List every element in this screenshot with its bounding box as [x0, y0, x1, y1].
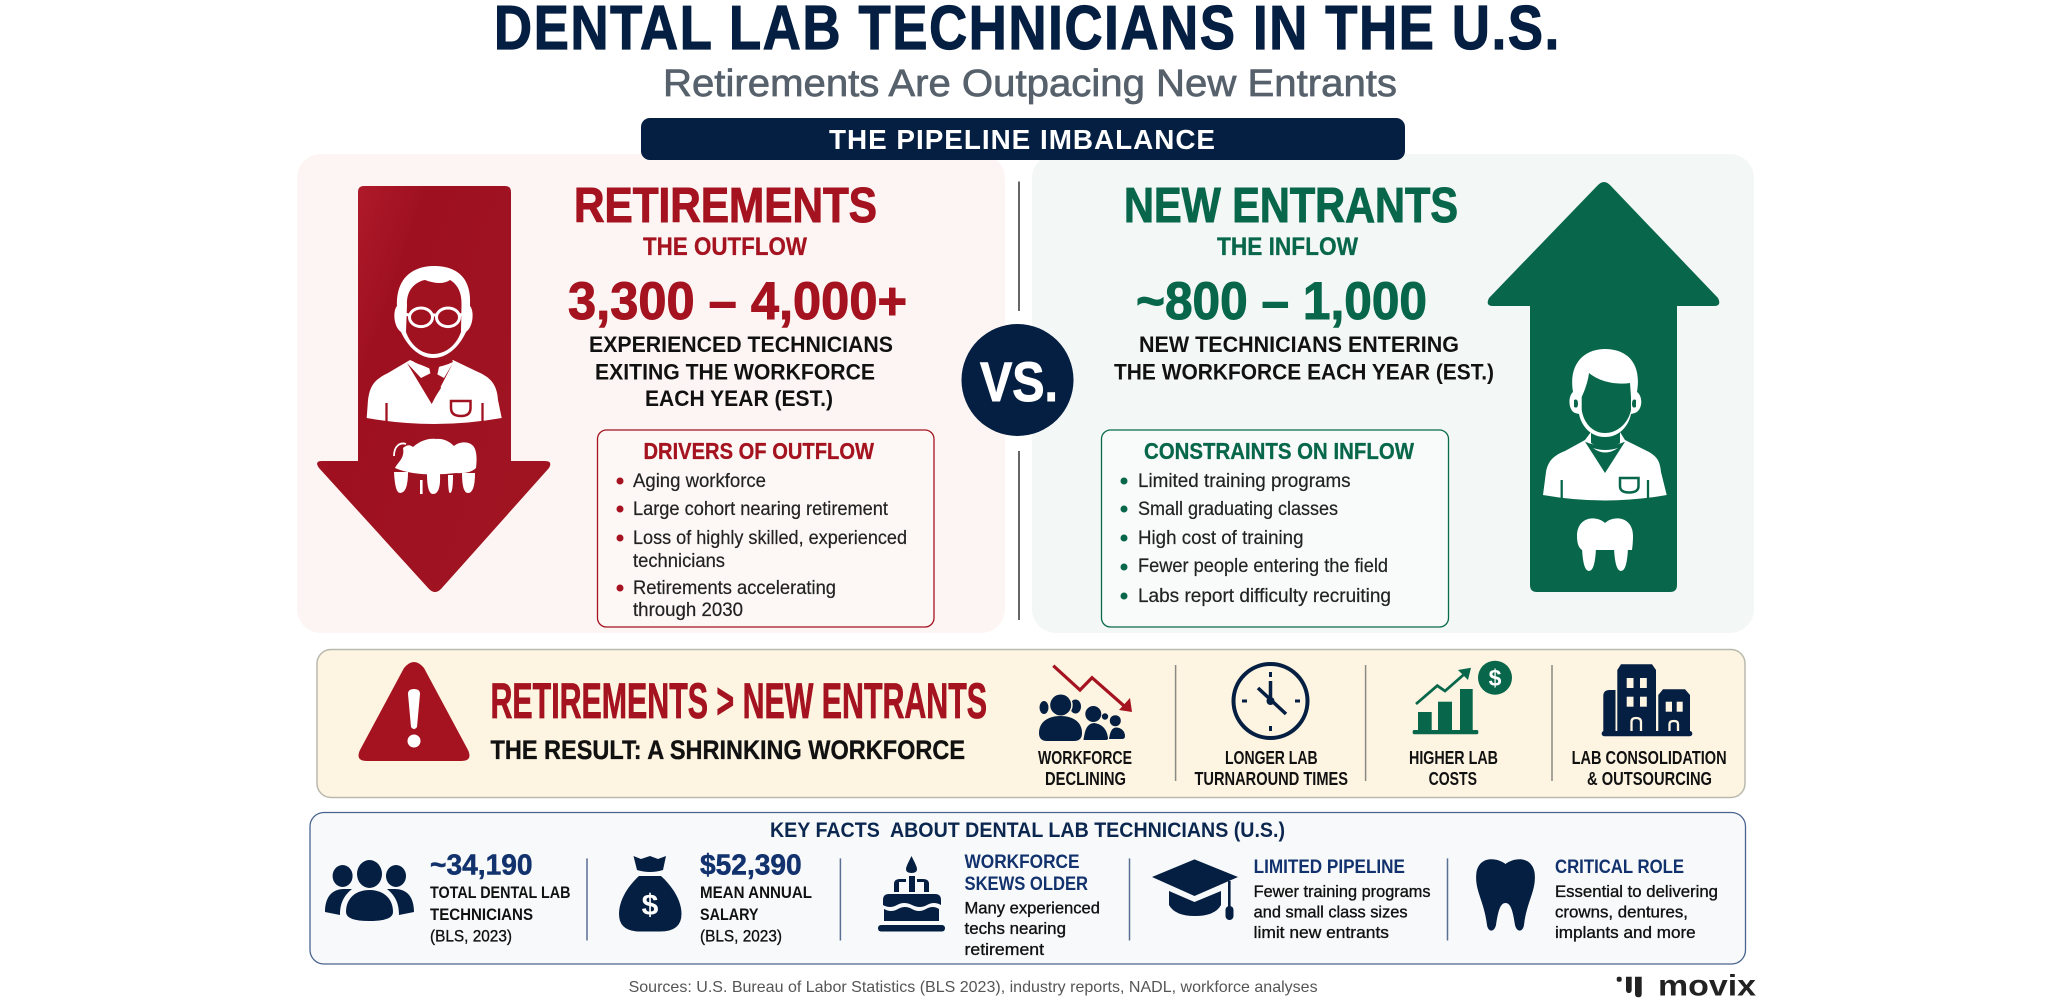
fact: mean salary: MEAN ANNUAL	[700, 883, 812, 902]
fact: total technicians: (BLS, 2023)	[430, 926, 512, 946]
effect: longer turnaround: LONGER LAB	[1225, 748, 1318, 768]
fact: limited pipeline: and small class sizes	[1254, 903, 1408, 922]
subheading: shrinking workforce: THE RESULT: A SHRINKING WORKFORCE	[490, 735, 965, 765]
fact: workforce skews older	[878, 851, 1100, 959]
panel: drivers of outflow: Aging workforce	[633, 471, 766, 492]
subheading: the outflow: THE OUTFLOW	[643, 233, 807, 261]
description: inflow	[1114, 332, 1494, 384]
description: inflow: THE WORKFORCE EACH YEAR (EST.)	[1114, 360, 1494, 384]
description: outflow: EACH YEAR (EST.)	[645, 386, 833, 411]
panel: constraints on inflow: Limited training programs	[1138, 471, 1351, 492]
panel: drivers of outflow	[598, 430, 934, 627]
fact: critical role: crowns, dentures,	[1555, 903, 1688, 922]
banner: the pipeline imbalance: THE PIPELINE IMBALANCE	[829, 124, 1216, 155]
fact: limited pipeline: Fewer training programs	[1254, 882, 1431, 901]
big number: retirements: 3,300 – 4,000+	[568, 272, 907, 331]
panel: constraints on inflow	[1102, 430, 1448, 627]
banner: the pipeline imbalance	[641, 118, 1405, 160]
panel: drivers of outflow: through 2030	[633, 600, 743, 621]
fact: workforce skews older: techs nearing	[964, 919, 1066, 938]
icon: warning triangle	[359, 662, 469, 761]
description: outflow: EXITING THE WORKFORCE	[595, 360, 875, 384]
fact: mean salary: $	[642, 889, 659, 922]
panel: drivers of outflow: Loss of highly skilled, experienced	[633, 528, 907, 549]
panel: constraints on inflow: Labs report difficulty recruiting	[1138, 586, 1391, 607]
fact: limited pipeline	[1152, 856, 1431, 942]
effect: higher costs: COSTS	[1429, 769, 1477, 789]
panel: retirements	[297, 154, 1005, 633]
panel: result	[317, 650, 1745, 798]
subtitle: Retirements Are Outpacing New Entrants	[663, 63, 1397, 105]
fact: workforce skews older: retirement	[964, 940, 1044, 959]
big number: new entrants: ~800 – 1,000	[1136, 272, 1427, 331]
fact: total technicians: TOTAL DENTAL LAB	[430, 883, 570, 902]
logo: movix: movix	[1658, 970, 1756, 1002]
subheading: the inflow: THE INFLOW	[1217, 233, 1358, 261]
effect: consolidation: & OUTSOURCING	[1587, 769, 1712, 789]
fact: total technicians: ~34,190	[430, 850, 533, 882]
fact: limited pipeline: LIMITED PIPELINE	[1254, 856, 1405, 878]
panel: constraints on inflow: Small graduating classes	[1138, 499, 1338, 520]
fact: total technicians: TECHNICIANS	[430, 905, 533, 924]
panel: drivers of outflow: Retirements accelerating	[633, 578, 836, 599]
fact: mean salary: (BLS, 2023)	[700, 926, 782, 946]
fact: total technicians	[325, 850, 570, 946]
effect: workforce declining: DECLINING	[1045, 769, 1126, 789]
description: outflow	[589, 332, 893, 411]
effect: higher costs: HIGHER LAB	[1409, 748, 1498, 768]
effect: consolidation: LAB CONSOLIDATION	[1572, 748, 1727, 768]
panel: new entrants	[1032, 154, 1754, 633]
sources: Sources: U.S. Bureau of Labor Statistics (BLS 2023), industry reports, NADL, workforce analyses	[629, 979, 1318, 996]
heading: retirements greater than new entrants: RETIREMENTS > NEW ENTRANTS	[490, 673, 987, 729]
panel: constraints on inflow: Fewer people entering the field	[1138, 556, 1388, 577]
heading: retirements: RETIREMENTS	[574, 179, 877, 233]
effect: consolidation	[1572, 664, 1727, 789]
icon: down arrow with retiring technician	[317, 186, 550, 592]
effect: longer turnaround	[1194, 664, 1348, 789]
fact: workforce skews older: WORKFORCE	[964, 851, 1080, 873]
description: inflow: NEW TECHNICIANS ENTERING	[1139, 332, 1459, 357]
effect: workforce declining: WORKFORCE	[1038, 748, 1132, 768]
panel: constraints on inflow: CONSTRAINTS ON INFLOW	[1144, 438, 1414, 464]
effect: higher costs: $	[1489, 665, 1502, 691]
fact: critical role	[1476, 856, 1718, 942]
description: outflow: EXPERIENCED TECHNICIANS	[589, 332, 893, 357]
fact: critical role: implants and more	[1555, 923, 1696, 942]
panel: drivers of outflow: Large cohort nearing retirement	[633, 499, 889, 520]
fact: workforce skews older: SKEWS OLDER	[964, 873, 1088, 895]
fact: limited pipeline: limit new entrants	[1254, 923, 1389, 942]
panel: constraints on inflow: High cost of training	[1138, 528, 1304, 549]
effect: workforce declining	[1038, 666, 1132, 789]
panel: drivers of outflow: technicians	[633, 551, 725, 572]
divider: versus	[962, 182, 1074, 620]
icon: up arrow with new technician	[1488, 182, 1719, 592]
fact: mean salary	[619, 850, 812, 946]
divider: versus: VS.	[980, 350, 1058, 413]
fact: mean salary: SALARY	[700, 905, 759, 924]
heading: key facts: KEY FACTS ABOUT DENTAL LAB TECHNICIANS (U.S.)	[770, 819, 1285, 842]
panel: drivers of outflow: DRIVERS OF OUTFLOW	[644, 438, 874, 464]
effect: longer turnaround: TURNAROUND TIMES	[1194, 769, 1348, 789]
heading: new entrants: NEW ENTRANTS	[1124, 179, 1458, 233]
panel: key facts	[310, 812, 1746, 964]
fact: workforce skews older: Many experienced	[964, 899, 1100, 918]
fact: critical role: CRITICAL ROLE	[1555, 856, 1684, 878]
effect: higher costs	[1409, 661, 1512, 789]
fact: mean salary: $52,390	[700, 850, 802, 882]
logo: movix	[1617, 970, 1756, 1002]
fact: critical role: Essential to delivering	[1555, 882, 1718, 901]
